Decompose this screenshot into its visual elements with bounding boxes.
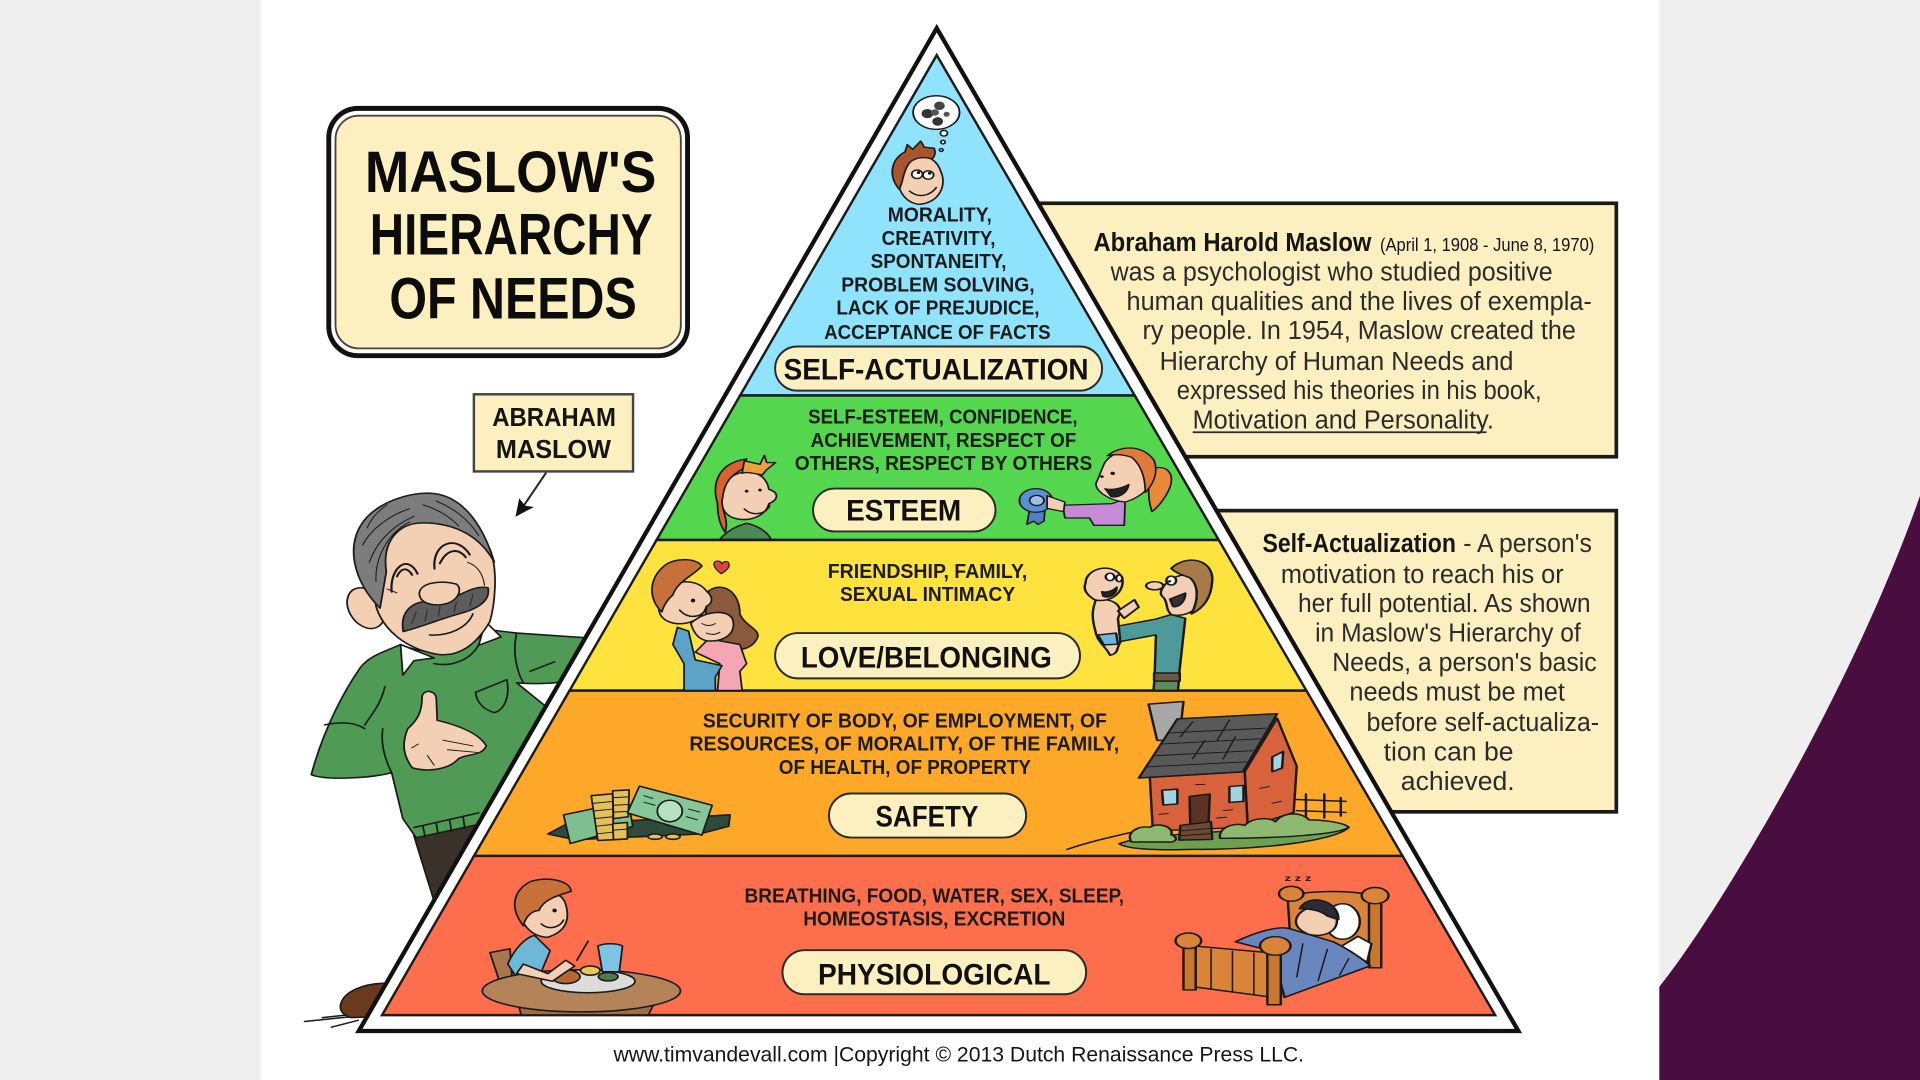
icon: money and coins <box>548 786 730 844</box>
table base <box>519 1006 653 1015</box>
sweater <box>311 629 601 838</box>
needs text <box>795 407 1092 475</box>
father hair <box>1171 560 1212 614</box>
needs text: ACCEPTANCE OF FACTS <box>824 322 1051 344</box>
glass <box>598 944 622 972</box>
hair <box>515 879 571 926</box>
needs text: ACHIEVEMENT, RESPECT OF <box>811 430 1076 452</box>
dark bill stacks <box>548 815 730 840</box>
self-actualization text <box>1262 530 1599 796</box>
chimney <box>1149 701 1183 740</box>
door <box>1190 794 1210 825</box>
fence <box>1297 794 1346 818</box>
collar <box>401 622 501 675</box>
self-actualization text: her full potential. As shown <box>1298 590 1591 618</box>
shirt <box>720 523 771 539</box>
icon: hugging couple <box>652 560 758 690</box>
sleeper head <box>1296 907 1337 935</box>
needs text: MORALITY, <box>888 205 992 227</box>
ground lines <box>305 1014 360 1027</box>
girl face <box>691 612 733 641</box>
pocket <box>476 680 508 713</box>
steps <box>1179 822 1212 840</box>
needs text <box>828 561 1027 606</box>
panel: title box <box>329 108 688 356</box>
self-actualization text: motivation to reach his or <box>1281 561 1564 589</box>
needs text: SEXUAL INTIMACY <box>840 584 1016 606</box>
needs text: HOMEOSTASIS, EXCRETION <box>803 909 1065 931</box>
moustache <box>403 587 488 632</box>
baby body <box>1093 599 1120 655</box>
father legs <box>1153 677 1179 690</box>
windows <box>1162 751 1283 805</box>
needs text: CREATIVITY, <box>882 228 996 250</box>
blanket <box>1236 928 1370 997</box>
shoe <box>340 983 396 1018</box>
tier content: self-actualization <box>775 96 1102 391</box>
pyramid outline <box>359 28 1518 1031</box>
pyramid <box>359 28 1518 1031</box>
icon: thinking boy <box>892 96 960 204</box>
icon: boy eating <box>482 879 681 1015</box>
biography text: Hierarchy of Human Needs and <box>1160 348 1513 376</box>
headboard <box>1288 891 1376 966</box>
pill: esteem <box>813 489 996 531</box>
self-actualization text: tion can be <box>1384 738 1513 766</box>
biography text: Abraham Harold Maslow <box>1093 229 1372 257</box>
biography text <box>1093 229 1594 435</box>
pill: love and belonging: LOVE/BELONGING <box>801 641 1052 674</box>
ear <box>340 583 392 634</box>
zzz: z z z <box>1284 874 1312 883</box>
needs text: LACK OF PREJUDICE, <box>836 298 1040 320</box>
side wall <box>1245 718 1297 827</box>
needs text: FRIENDSHIP, FAMILY, <box>828 561 1027 583</box>
icon: father and baby <box>1085 560 1212 690</box>
ribbon <box>1019 489 1052 524</box>
needs text: SELF-ESTEEM, CONFIDENCE, <box>808 407 1078 429</box>
icon: house <box>1067 701 1349 850</box>
footboard <box>1190 946 1272 997</box>
self-actualization text: in Maslow's Hierarchy of <box>1315 620 1582 648</box>
hair <box>742 455 776 475</box>
plate <box>541 970 635 993</box>
hand <box>404 691 486 770</box>
left bill <box>564 801 633 844</box>
girl hair <box>704 587 758 650</box>
icon: girl with ribbon <box>1019 448 1171 525</box>
chair <box>490 949 512 979</box>
smile <box>430 614 473 635</box>
title: HIERARCHY <box>370 203 653 268</box>
footer copyright: www.timvandevall.com |Copyright © 2013 Dutch Renaissance Press LLC. <box>612 1043 1304 1067</box>
path line <box>1067 831 1138 849</box>
title: OF NEEDS <box>389 266 637 331</box>
needs text: SPONTANEITY, <box>871 251 1007 273</box>
needs text <box>689 710 1119 779</box>
tier: safety band <box>474 691 1403 856</box>
pill: physiological: PHYSIOLOGICAL <box>818 958 1051 991</box>
bushes <box>1130 814 1349 842</box>
hair <box>892 141 935 189</box>
needs text <box>744 885 1124 931</box>
pillows <box>1326 904 1360 939</box>
heart <box>714 561 729 574</box>
ponytail <box>1149 468 1171 512</box>
grass <box>1119 827 1349 850</box>
pill: self-actualization: SELF-ACTUALIZATION <box>784 354 1089 387</box>
table top <box>482 970 681 1012</box>
father body <box>1110 615 1185 674</box>
needs text: OF HEALTH, OF PROPERTY <box>779 757 1032 779</box>
head <box>721 472 776 520</box>
self-actualization text: achieved. <box>1401 768 1515 796</box>
biography text: expressed his theories in his book, <box>1177 377 1542 405</box>
pill: esteem: ESTEEM <box>846 494 961 527</box>
face <box>375 516 495 655</box>
head <box>898 155 943 204</box>
self-actualization text: Needs, a person's basic <box>1332 649 1597 677</box>
tier content: physiological <box>482 874 1389 1015</box>
tier: physiological band <box>382 856 1495 1015</box>
eyes <box>391 543 470 592</box>
arm and fork <box>517 960 575 981</box>
panel: biography box <box>931 203 1616 457</box>
pill: safety: SAFETY <box>876 801 979 834</box>
boy head <box>659 582 712 624</box>
front wall <box>1150 772 1248 831</box>
self-actualization text: needs must be met <box>1349 678 1565 706</box>
girl dress <box>695 639 747 690</box>
biography text: human qualities and the lives of exempla- <box>1127 288 1592 316</box>
pill: safety <box>829 793 1026 838</box>
head <box>521 892 567 937</box>
needs text: SECURITY OF BODY, OF EMPLOYMENT, OF <box>703 710 1107 732</box>
label: Abraham Maslow <box>474 394 633 471</box>
self-actualization text: before self-actualiza- <box>1367 709 1599 737</box>
boy hair <box>652 560 702 612</box>
pill: love and belonging <box>775 633 1080 678</box>
arrow to Maslow <box>516 473 546 517</box>
pill: physiological <box>782 950 1086 994</box>
tier content: esteem <box>715 407 1171 539</box>
shirt <box>508 935 550 977</box>
white slide panel <box>261 0 1659 1080</box>
biography text: was a psychologist who studied positive <box>1110 258 1553 286</box>
loose coins <box>648 834 662 839</box>
needs text: BREATHING, FOOD, WATER, SEX, SLEEP, <box>744 885 1124 907</box>
purple corner shape <box>1659 496 1920 1080</box>
label: Abraham Maslow: MASLOW <box>496 436 612 464</box>
tier content: safety <box>548 701 1349 850</box>
head <box>1096 450 1155 502</box>
roof <box>1139 714 1277 778</box>
tier: esteem band <box>657 396 1219 540</box>
tier: love and belonging band <box>570 540 1306 691</box>
title: MASLOW'S <box>365 140 656 205</box>
label: Abraham Maslow: ABRAHAM <box>492 404 616 432</box>
boy shirt <box>673 627 722 690</box>
front bill <box>627 786 712 835</box>
title <box>365 140 656 331</box>
tier content: love and belonging <box>652 560 1212 690</box>
illustration: Abraham Maslow <box>305 493 601 1027</box>
trousers <box>414 821 481 901</box>
self-actualization text: - A person's <box>1463 530 1592 558</box>
icon: sleeping in bed <box>1176 874 1389 1005</box>
biography text: Motivation and Personality. <box>1193 407 1494 435</box>
needs text: PROBLEM SOLVING, <box>841 274 1035 296</box>
biography text: (April 1, 1908 - June 8, 1970) <box>1380 234 1594 255</box>
needs text: OTHERS, RESPECT BY OTHERS <box>795 453 1092 475</box>
self-actualization text: Self-Actualization <box>1262 530 1456 558</box>
thought bubble <box>913 96 960 151</box>
nose <box>419 582 459 605</box>
cap <box>715 459 747 532</box>
needs text: RESOURCES, OF MORALITY, OF THE FAMILY, <box>689 734 1119 756</box>
baby head <box>1085 568 1123 601</box>
coin stacks <box>591 794 614 840</box>
needs text <box>824 205 1051 344</box>
arm <box>1063 499 1125 525</box>
father head <box>1161 575 1206 615</box>
icon: boy <box>715 455 776 539</box>
biography text: ry people. In 1954, Maslow created the <box>1142 317 1576 345</box>
tier: self-actualization band <box>740 55 1135 396</box>
hair <box>1107 448 1156 492</box>
panel: self-actualization box <box>1053 511 1616 812</box>
hair <box>354 493 494 608</box>
